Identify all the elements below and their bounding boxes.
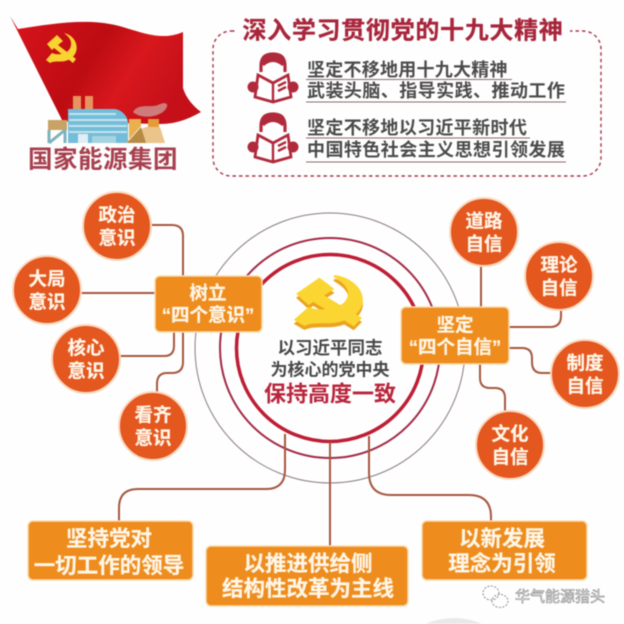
box: party leadership (28, 521, 193, 580)
circle: theory confidence: 自信 (540, 278, 578, 298)
circle: alignment awareness: 意识 (134, 428, 172, 448)
circle: overall awareness: 大局 (28, 268, 66, 290)
text block: first commitment: 武装头脑、指导实践、推动工作 (307, 80, 565, 101)
box: party leadership: 一切工作的领导 (34, 554, 184, 578)
circle: theory confidence (525, 242, 593, 310)
text block: second commitment: 中国特色社会主义思想引领发展 (307, 139, 565, 160)
panel: study the spirit (213, 18, 601, 176)
circle: system confidence: 制度 (566, 352, 604, 374)
circle: culture confidence: 自信 (491, 446, 529, 468)
box: four consciousness: 树立 (189, 282, 227, 304)
connectors: left group (80, 225, 183, 392)
text block: first commitment: 坚定不移地用十九大精神 (307, 59, 508, 80)
circle: core awareness: 核心 (67, 338, 105, 358)
company name: 国家能源集团 (28, 146, 178, 174)
box: new development: 理念为引领 (448, 551, 556, 576)
box: new development: 以新发展 (459, 527, 545, 551)
connectors: bottom group (119, 434, 491, 547)
watermark: 华气能源猎头 (515, 588, 605, 606)
circle: overall awareness (13, 256, 81, 324)
icon: reader 2 (248, 114, 298, 162)
box: four confidences: 坚定 (436, 314, 474, 336)
circle: alignment awareness: 看齐 (134, 404, 172, 426)
panel heading: 深入学习贯彻党的十九大精神 (242, 18, 564, 44)
circle: core awareness (52, 325, 120, 393)
circle: political awareness: 意识 (98, 228, 136, 248)
faint corner arc (425, 618, 482, 624)
circle: system confidence: 自信 (566, 376, 604, 396)
circle: culture confidence: 文化 (491, 424, 529, 444)
flag emblem (46, 33, 77, 63)
box: new development (422, 521, 587, 580)
circle: core awareness: 意识 (67, 360, 105, 382)
concentric rings (195, 213, 465, 483)
circle: overall awareness: 意识 (28, 292, 66, 312)
box: supply-side reform: 结构性改革为主线 (222, 577, 394, 601)
box: four consciousness: “四个意识” (162, 304, 254, 326)
circle: path confidence: 道路 (465, 210, 503, 232)
box: party leadership: 坚持党对 (66, 527, 152, 551)
circle: political awareness: 政治 (98, 204, 136, 226)
box: four confidences: “四个自信” (409, 336, 501, 358)
circle: path confidence: 自信 (465, 234, 503, 254)
center emblem: hammer and sickle (296, 276, 361, 329)
circle: political awareness (83, 192, 151, 260)
circle: alignment awareness (119, 392, 187, 460)
connectors: right group (480, 265, 561, 412)
text block: second commitment (306, 117, 566, 162)
party flag (10, 16, 201, 124)
center text: 以习近平同志 (278, 338, 382, 358)
watermark (483, 586, 605, 608)
center text (264, 338, 396, 406)
box: four confidences (401, 307, 509, 364)
text block: first commitment (306, 59, 566, 102)
box: supply-side reform (206, 546, 408, 606)
center text: 保持高度一致 (264, 382, 396, 406)
icon: chat bubbles (483, 586, 508, 608)
circle: culture confidence (476, 411, 544, 479)
icon: reader 1 (248, 54, 298, 102)
text block: second commitment: 坚定不移地以习近平新时代 (307, 117, 527, 138)
box: four consciousness (155, 276, 262, 332)
energy plant illustration (48, 96, 167, 143)
box: supply-side reform: 以推进供给侧 (243, 552, 373, 576)
circle: path confidence (450, 198, 518, 266)
center text: 为核心的党中央 (270, 360, 390, 380)
circle: system confidence (551, 340, 619, 408)
circle: theory confidence: 理论 (540, 254, 578, 276)
